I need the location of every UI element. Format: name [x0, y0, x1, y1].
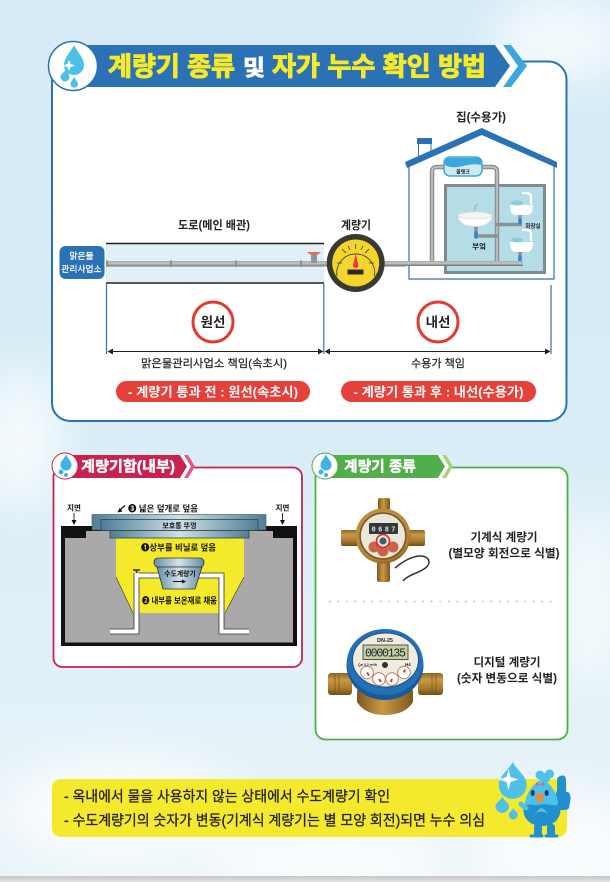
bathroom fixtures: 화장실 — [525, 222, 541, 230]
callout: how to check — [52, 779, 567, 837]
cross-section diagram: 보호통 뚜껑 — [162, 521, 197, 530]
digital meter photo: H4 — [405, 662, 411, 667]
title banner: 및 — [243, 56, 265, 80]
mechanical meter label — [448, 530, 560, 560]
cross-section diagram: 지면 — [276, 502, 289, 512]
digital meter photo: 0000135 — [365, 648, 406, 660]
badge: outer line: 원선 — [201, 315, 225, 330]
dotted separator — [329, 600, 556, 602]
cross-section diagram: ❸ 넓은 덮개로 덮음 — [128, 504, 198, 514]
cross-section diagram: 수도계량기 — [164, 569, 196, 578]
panel: meter types — [312, 453, 568, 740]
mechanical meter photo — [341, 498, 429, 582]
water utility box: 맑은물 — [69, 250, 94, 261]
sink — [458, 205, 492, 251]
heading: meter box: 계량기함(내부) — [81, 458, 175, 476]
label: utility responsibility: 맑은물관리사업소 책임(속초시) — [141, 357, 287, 370]
badge: inner line: 내선 — [426, 315, 450, 330]
pill: before meter — [116, 381, 310, 402]
label: meter: 계량기 — [341, 218, 371, 232]
cross-section diagram — [61, 502, 297, 646]
mascot: water drop character — [496, 762, 571, 837]
digital meter photo: Qn 3.2 m³/h — [358, 663, 377, 667]
mechanical meter label: (별모양 회전으로 식별) — [448, 546, 560, 560]
digital meter photo — [328, 629, 443, 715]
panel: meter box interior — [52, 453, 302, 667]
heading: meter box — [52, 453, 195, 479]
water utility box: 관리사업소 — [61, 264, 102, 274]
label: house: 집(수용가) — [456, 110, 506, 124]
pill: after meter: - 계량기 통과 후 : 내선(수용가) — [354, 384, 524, 400]
digital meter label: 디지털 계량기 — [474, 655, 540, 669]
sink: 부엌 — [472, 241, 486, 251]
digital meter label: (숫자 변동으로 식별) — [457, 672, 557, 685]
meter gauge icon — [327, 234, 385, 292]
cross-section diagram: ❶상부를 비닐로 덮음 — [141, 542, 216, 552]
pill: after meter — [341, 381, 536, 402]
callout: how to check: - 수도계량기의 숫자가 변동(기계식 계량기는 별 모양 회전)되면 누수 의심 — [64, 812, 485, 830]
heading: meter types — [312, 453, 453, 479]
water tank: 물탱크 — [456, 168, 470, 176]
house — [405, 128, 557, 279]
mechanical meter photo: 0687 — [372, 526, 396, 534]
badge: inner line — [418, 302, 458, 342]
label: road main: 도로(메인 배관) — [178, 218, 250, 232]
cross-section diagram: ❷ 내부를 보온재로 채움 — [142, 594, 217, 606]
heading: meter types: 계량기 종류 — [344, 458, 416, 476]
road main pipe — [106, 243, 523, 283]
mechanical meter label: 기계식 계량기 — [470, 530, 538, 544]
water utility box — [60, 246, 104, 279]
house plumbing — [432, 167, 520, 264]
label: customer responsibility: 수용가 책임 — [411, 357, 465, 370]
responsibility bounds and arrows — [106, 284, 551, 354]
title banner — [48, 42, 527, 90]
cross-section diagram: 지면 — [67, 502, 81, 512]
panel: main meter diagram — [48, 42, 566, 421]
callout: how to check: - 옥내에서 물을 사용하지 않는 상태에서 수도계량기 확인 — [64, 788, 390, 806]
title banner: 자가 누수 확인 방법 — [272, 52, 486, 82]
bathroom fixtures — [510, 193, 541, 252]
badge: outer line — [193, 302, 233, 342]
title banner: 계량기 종류 — [108, 52, 235, 82]
digital meter label — [457, 655, 557, 685]
pill: before meter: - 계량기 통과 전 : 원선(속초시) — [128, 384, 298, 400]
water tank — [444, 157, 482, 176]
digital meter photo: DN-25 — [377, 638, 393, 644]
